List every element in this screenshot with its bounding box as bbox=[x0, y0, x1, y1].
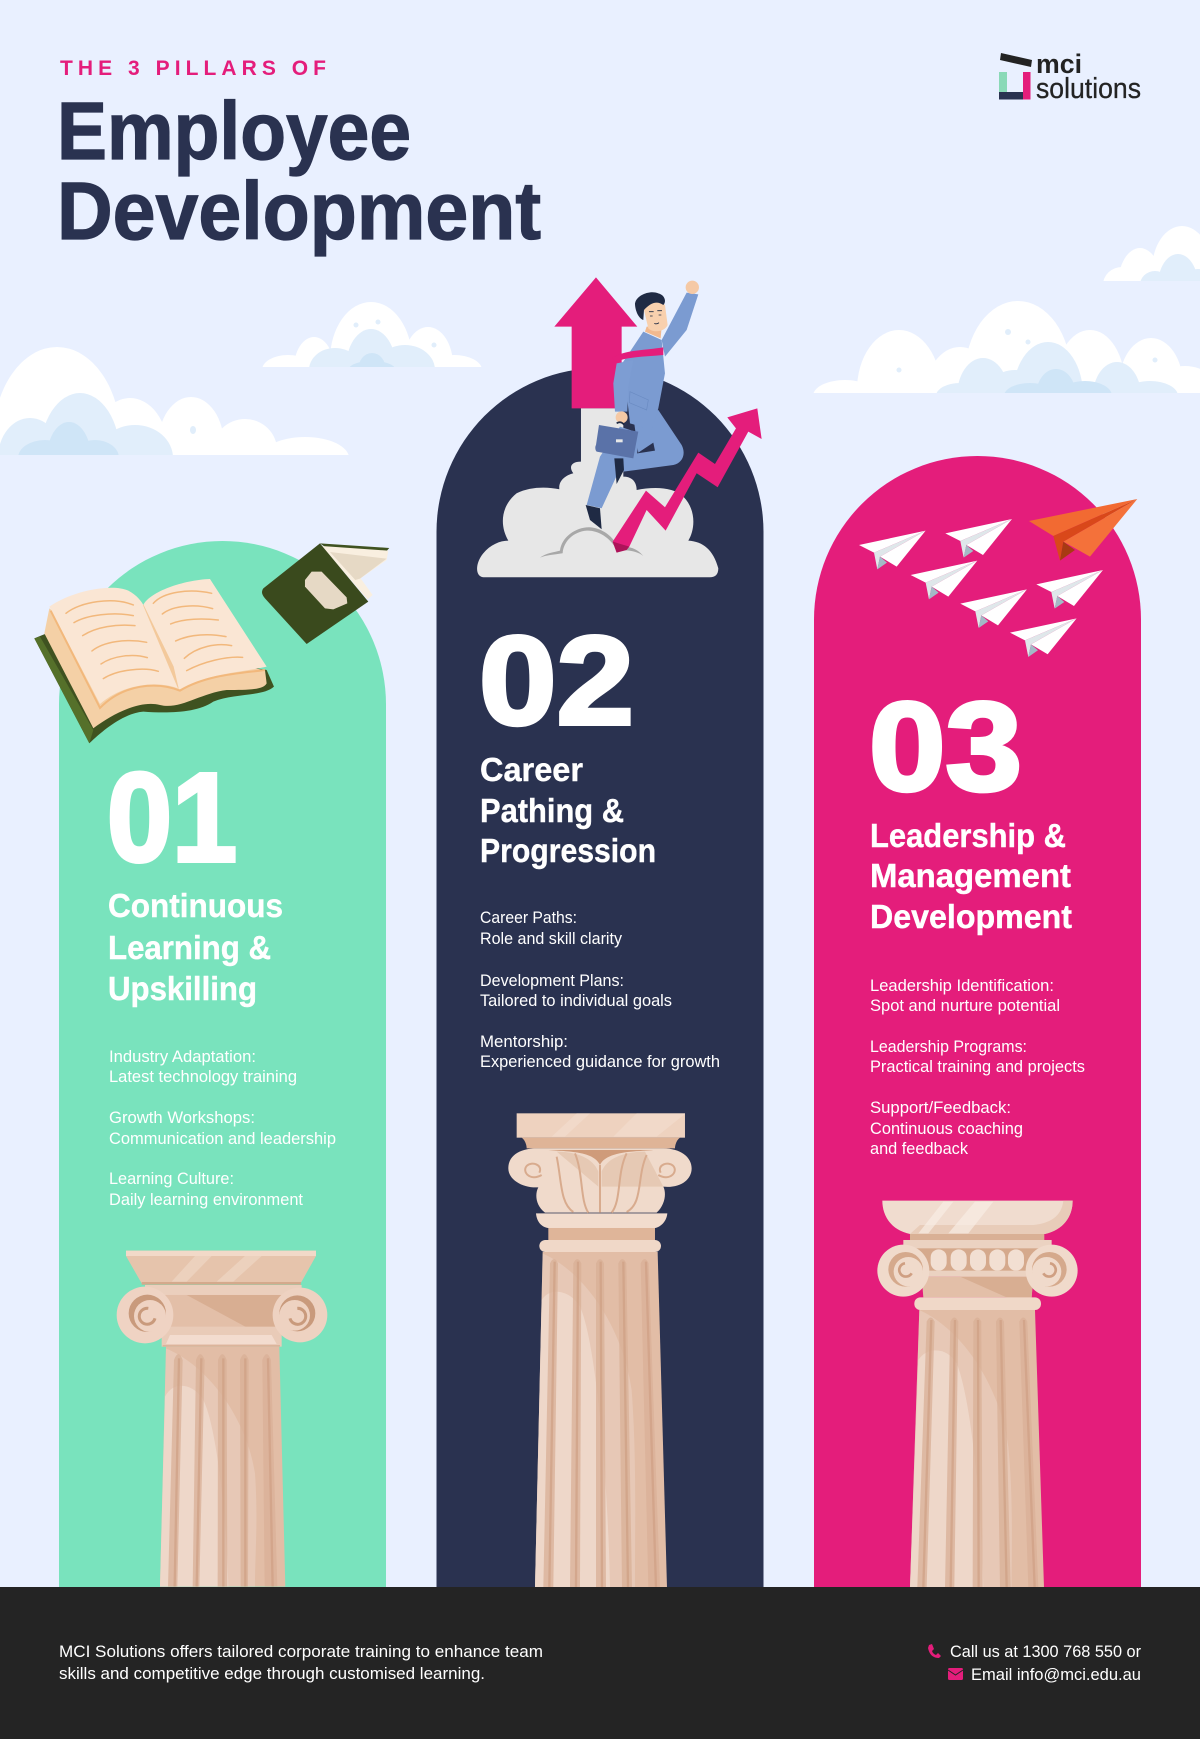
heading: Continuous bbox=[108, 887, 283, 924]
footer description: skills and competitive edge through customised learning. bbox=[59, 1664, 485, 1683]
heading: Progression bbox=[480, 832, 656, 869]
pillar 1 bbox=[117, 1251, 327, 1587]
logo: mci solutions: mci bbox=[1036, 49, 1082, 79]
heading: Leadership & bbox=[870, 817, 1066, 854]
body text: Mentorship: bbox=[480, 1032, 568, 1051]
heading: Development bbox=[870, 898, 1072, 935]
smoke cloud bbox=[477, 408, 718, 577]
title bbox=[57, 86, 541, 257]
heading bbox=[480, 751, 656, 869]
businessman bbox=[586, 281, 699, 529]
heading bbox=[108, 887, 283, 1007]
body text: Tailored to individual goals bbox=[480, 991, 672, 1010]
illustration: businessman on rising arrows bbox=[477, 277, 762, 577]
pillar 3 bbox=[877, 1201, 1078, 1587]
body text: Leadership Identification: bbox=[870, 976, 1054, 995]
body text: Practical training and projects bbox=[870, 1057, 1085, 1076]
heading: Upskilling bbox=[108, 970, 257, 1007]
heading bbox=[870, 817, 1072, 935]
green arch bbox=[59, 541, 386, 1587]
icon: open book bbox=[34, 579, 274, 743]
logo: mci solutions: solutions bbox=[1036, 73, 1141, 105]
label: the 3 pillars of: THE 3 PILLARS OF bbox=[60, 57, 326, 80]
heading: Management bbox=[870, 857, 1071, 894]
number 03: 03 bbox=[869, 676, 1022, 817]
contact phone: Call us at 1300 768 550 or bbox=[950, 1642, 1141, 1661]
cloud: far left bbox=[0, 347, 348, 455]
cloud: top right bbox=[1104, 226, 1200, 281]
pink arch bbox=[814, 456, 1141, 1587]
heading: Learning & bbox=[108, 929, 271, 966]
body text: Industry Adaptation: bbox=[109, 1047, 256, 1066]
body text: Development Plans: bbox=[480, 971, 624, 990]
panel: 03 leadership bbox=[814, 456, 1141, 1587]
number 02: 02 bbox=[479, 610, 634, 751]
heading: Career bbox=[480, 751, 583, 788]
icon: mail bbox=[948, 1668, 963, 1680]
footer bar bbox=[0, 1587, 1200, 1739]
panel: 02 career pathing bbox=[436, 277, 764, 1587]
body text bbox=[109, 1047, 336, 1209]
body text: Leadership Programs: bbox=[870, 1037, 1027, 1056]
footer description: MCI Solutions offers tailored corporate training to enhance team bbox=[59, 1642, 543, 1661]
body text: Latest technology training bbox=[109, 1067, 297, 1086]
body text: Communication and leadership bbox=[109, 1129, 336, 1148]
icon: phone bbox=[928, 1644, 941, 1658]
body text: Continuous coaching bbox=[870, 1119, 1023, 1138]
icon: closed book bbox=[262, 543, 389, 644]
body text: Role and skill clarity bbox=[480, 929, 622, 948]
footer description bbox=[59, 1642, 543, 1683]
body text: Support/Feedback: bbox=[870, 1098, 1011, 1117]
cloud: centre left bbox=[262, 302, 482, 367]
body text bbox=[480, 908, 720, 1071]
title: Employee bbox=[57, 86, 411, 177]
contact email: Email info@mci.edu.au bbox=[971, 1665, 1141, 1684]
logo: mci solutions bbox=[999, 49, 1141, 105]
body text: and feedback bbox=[870, 1139, 968, 1158]
body text: Daily learning environment bbox=[109, 1190, 303, 1209]
body text bbox=[870, 976, 1085, 1158]
body text: Spot and nurture potential bbox=[870, 996, 1060, 1015]
body text: Learning Culture: bbox=[109, 1169, 234, 1188]
navy arch bbox=[436, 368, 764, 1587]
body text: Experienced guidance for growth bbox=[480, 1052, 720, 1071]
icon: paper planes bbox=[859, 499, 1137, 657]
panel: 01 continuous learning bbox=[34, 541, 389, 1587]
body text: Growth Workshops: bbox=[109, 1108, 255, 1127]
cloud: right bbox=[814, 301, 1200, 393]
pink up arrow bbox=[554, 277, 637, 408]
heading: Pathing & bbox=[480, 792, 624, 829]
icon: orange paper plane bbox=[1029, 499, 1137, 561]
number 01: 01 bbox=[107, 747, 237, 888]
body text: Career Paths: bbox=[480, 908, 577, 927]
pillar 2 bbox=[508, 1113, 692, 1587]
title: Development bbox=[57, 166, 541, 257]
footer bbox=[0, 1587, 1200, 1739]
pink growth arrow bbox=[613, 408, 762, 553]
